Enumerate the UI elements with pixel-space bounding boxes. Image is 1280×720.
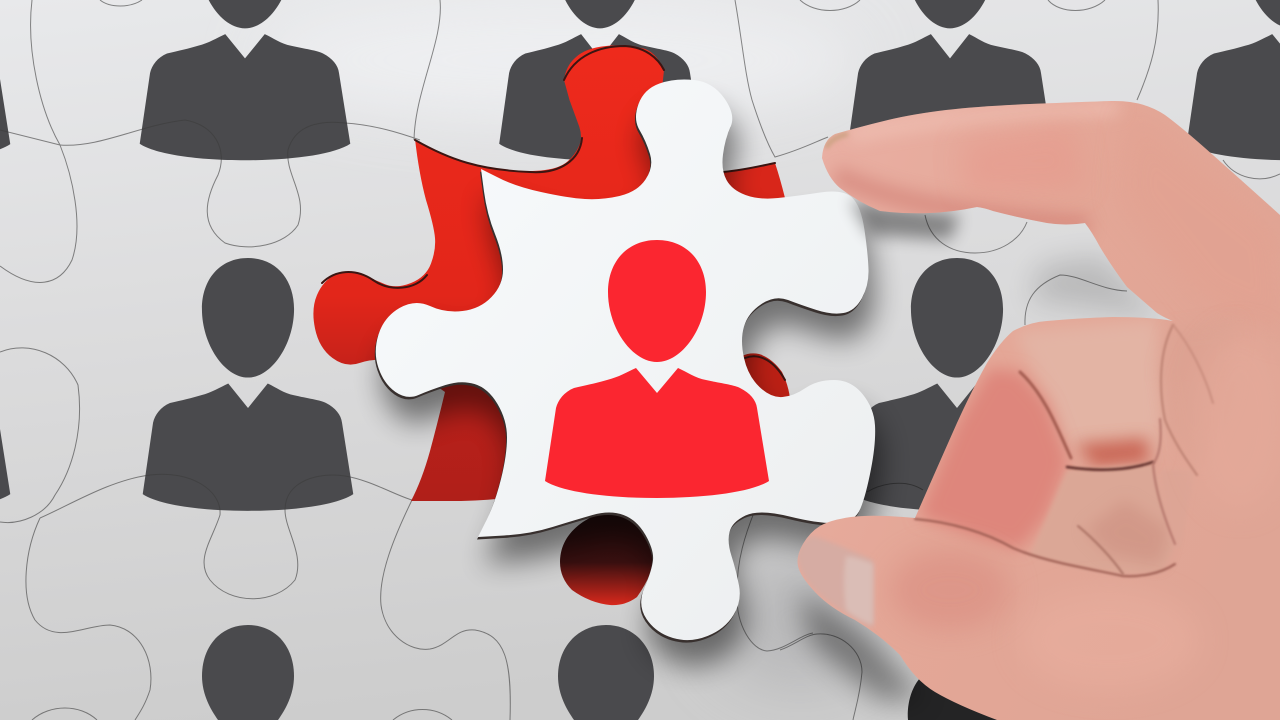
hand holding the piece [797, 101, 1280, 720]
hand shading and fingers [798, 102, 1214, 631]
middle finger proximal segment [918, 368, 1068, 550]
thumb redness [890, 550, 1010, 630]
hole edge shadows [322, 46, 785, 380]
shadow cast by the raised piece [382, 105, 881, 666]
red person icon on piece [545, 240, 769, 498]
ring finger [1045, 464, 1149, 526]
finger creases [915, 325, 1213, 576]
puzzle piece: white with dark underside edge [375, 79, 875, 643]
middle finger knuckle [1022, 322, 1160, 450]
index finger tip [826, 134, 848, 148]
thumb nail [798, 537, 871, 614]
hand silhouette [798, 101, 1280, 720]
thenar palm folds [1160, 320, 1240, 470]
shadow cast by the hand [800, 200, 1160, 700]
red hole revealed by the missing piece [313, 45, 790, 605]
